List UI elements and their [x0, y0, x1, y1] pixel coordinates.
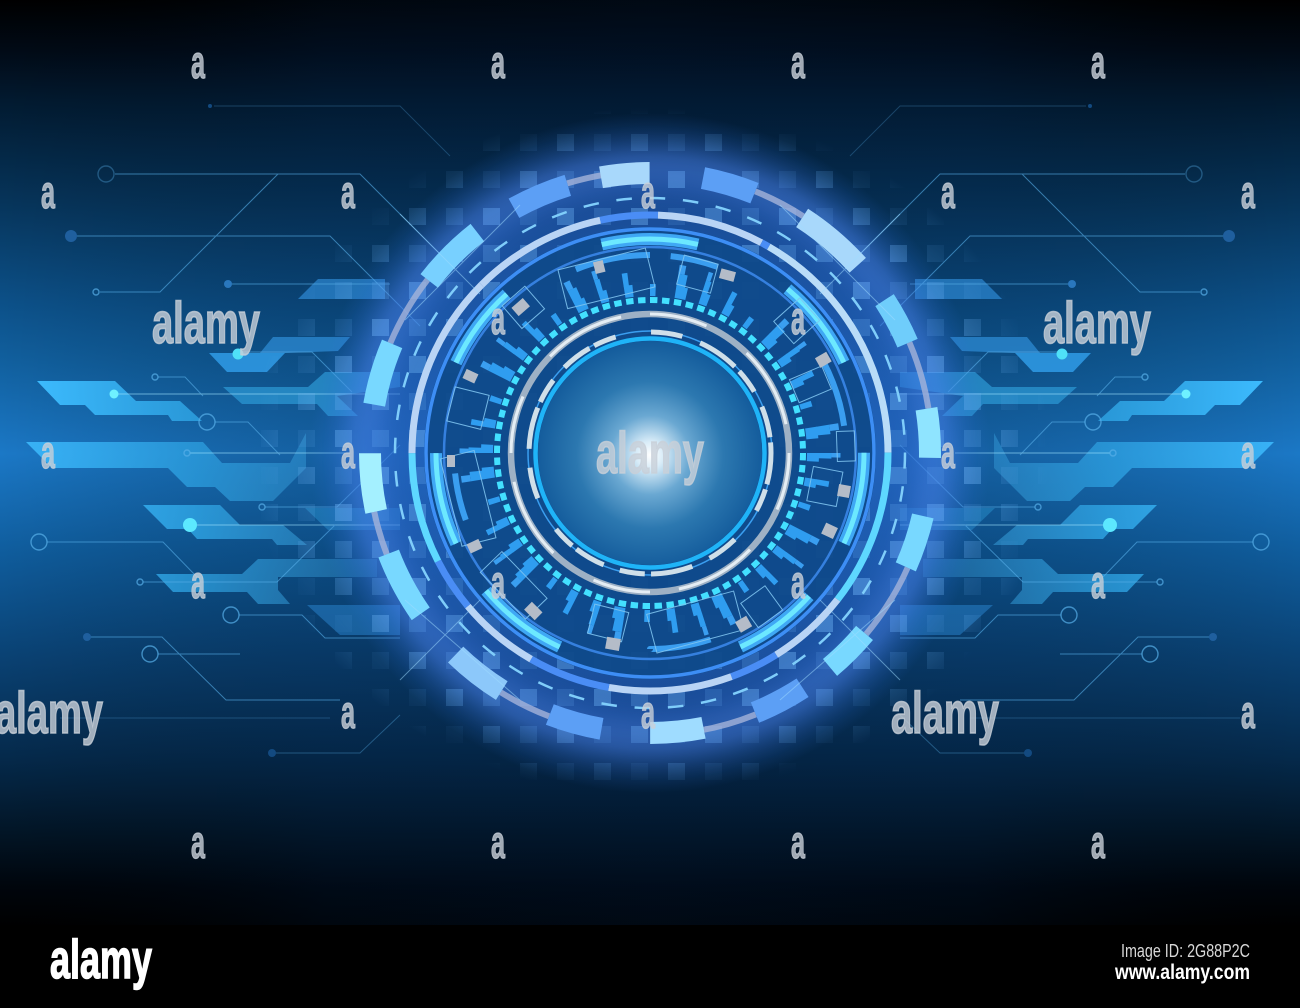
small a watermarks: a [941, 166, 955, 218]
cyan inner ring [536, 338, 764, 568]
outer segmented ring: grey connectors [368, 171, 932, 735]
dark inner disc [424, 227, 876, 679]
small a watermarks: a [941, 426, 955, 478]
light segmented ring [412, 215, 888, 691]
small a watermarks: a [1091, 36, 1105, 88]
small a watermarks: a [1091, 816, 1105, 868]
small a watermarks: a [491, 292, 505, 344]
glowing core orb [538, 341, 762, 565]
small a watermarks: a [191, 36, 205, 88]
small a watermarks: a [341, 686, 355, 738]
small a watermarks: a [1241, 166, 1255, 218]
small a watermarks: a [641, 166, 655, 218]
dashed orbit ring [395, 198, 905, 708]
small a watermarks: a [641, 686, 655, 738]
large alamy watermarks [0, 291, 1151, 746]
diagonal circuit overlay lines [400, 205, 900, 700]
small a watermarks: a [1091, 556, 1105, 608]
outer segmented ring: thick segments [370, 173, 930, 733]
HUD ring assembly [366, 169, 934, 737]
glow halo behind the ring [310, 113, 990, 793]
thin blue ring [426, 229, 874, 677]
grey marker squares [447, 260, 851, 651]
large alamy watermarks: alamy [152, 291, 260, 356]
small a watermarks: a [1241, 686, 1255, 738]
small a watermarks [41, 36, 1255, 868]
large alamy watermarks: alamy [596, 421, 704, 486]
blue bars inside boxes [452, 255, 848, 651]
footer alamy logo: alamy [50, 928, 152, 990]
blue inner thin ring [444, 247, 856, 659]
bright cores of cyan segments [436, 239, 864, 667]
small a watermarks: a [41, 166, 55, 218]
pixel squares field [268, 134, 1018, 780]
blurred glow ring [366, 169, 934, 737]
bright ring highlight [511, 314, 789, 592]
left circuit wing [26, 104, 450, 757]
small a watermarks: a [791, 292, 805, 344]
small a watermarks: a [341, 426, 355, 478]
small a watermarks: a [491, 816, 505, 868]
small a watermarks: a [491, 556, 505, 608]
small a watermarks: a [41, 426, 55, 478]
footer bar [0, 925, 1300, 1008]
small a watermarks: a [791, 556, 805, 608]
small a watermarks: a [1241, 426, 1255, 478]
thin blue inner line [528, 331, 772, 575]
white dashed ring [529, 332, 771, 574]
small a watermarks: a [191, 556, 205, 608]
small a watermarks: a [191, 816, 205, 868]
small a watermarks: a [341, 166, 355, 218]
footer image id: Image ID: 2G88P2C [1121, 941, 1250, 961]
small a watermarks: a [791, 816, 805, 868]
small a watermarks: a [791, 36, 805, 88]
radial data bars [464, 267, 836, 639]
cyan thick segments [436, 239, 864, 667]
outlined boxes [440, 248, 855, 653]
large alamy watermarks: alamy [1043, 291, 1151, 356]
footer website: www.alamy.com [1114, 961, 1250, 984]
small a watermarks: a [491, 36, 505, 88]
large alamy watermarks: alamy [891, 681, 999, 746]
right circuit wing [850, 104, 1274, 757]
grey ring [511, 314, 789, 592]
